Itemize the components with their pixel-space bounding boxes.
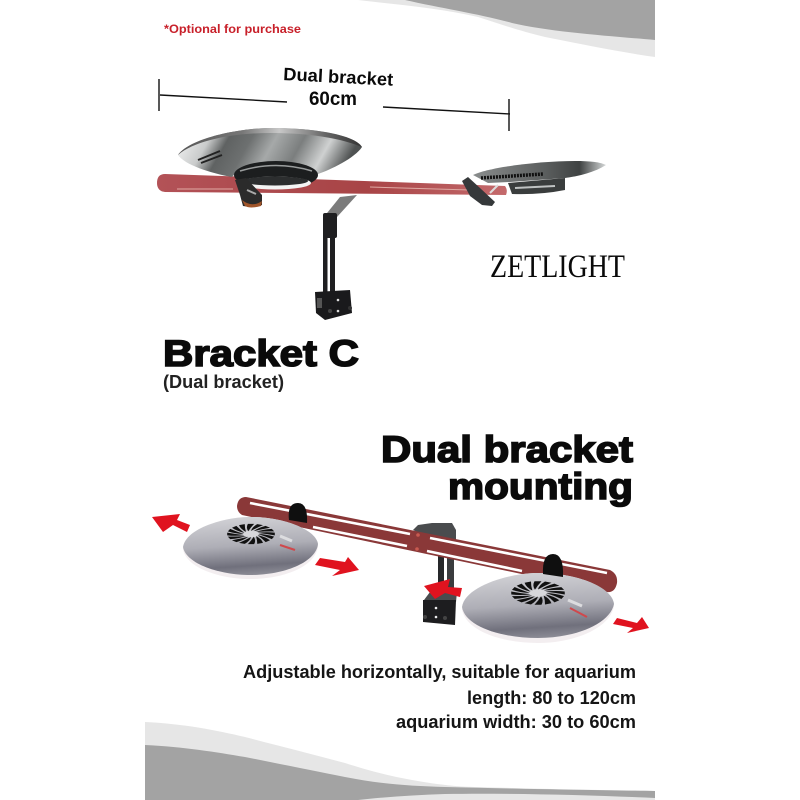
arrow: right dish moves right [613, 617, 649, 633]
bottom wave decoration [145, 722, 655, 800]
description text: Adjustable horizontally, suitable for aquarium [243, 662, 636, 682]
stand behind bar [438, 530, 444, 596]
top wave decoration [358, 0, 655, 57]
product photo: top view of mounted lights [183, 497, 617, 643]
arrow: right dish moves left [424, 579, 462, 599]
description text: length: 80 to 120cm [467, 688, 636, 708]
product photo: dual bracket with two lights [157, 128, 606, 320]
heading: dual bracket mounting: mounting [448, 466, 633, 507]
heading: Bracket C: Bracket C [163, 333, 359, 374]
left light dish [178, 128, 362, 208]
heading: dual bracket mounting [381, 429, 633, 507]
red bracket bar [157, 174, 507, 195]
dimension: dual bracket 60cm [159, 64, 510, 131]
right light dish [462, 573, 614, 643]
heading: dual bracket mounting: Dual bracket [381, 429, 633, 470]
subheading: dual bracket: (Dual bracket) [163, 372, 284, 392]
clamp box [315, 290, 352, 320]
description text: aquarium width: 30 to 60cm [396, 712, 636, 732]
left knob [289, 503, 307, 523]
brand: ZETLIGHT: ZETLIGHT [490, 249, 625, 285]
mounting arm [323, 195, 357, 293]
dimension: dual bracket 60cm: Dual bracket [283, 64, 394, 90]
arrow: left dish moves right [315, 557, 359, 576]
left light dish [183, 517, 318, 579]
dimension: dual bracket 60cm: 60cm [309, 89, 357, 110]
description text [243, 662, 636, 732]
right light dish [462, 161, 606, 206]
right knob [543, 554, 563, 577]
clamp box [423, 592, 457, 625]
arrow: left dish moves left [152, 514, 190, 532]
note: optional for purchase: *Optional for purchase [164, 24, 301, 36]
red bracket bar [237, 497, 617, 592]
